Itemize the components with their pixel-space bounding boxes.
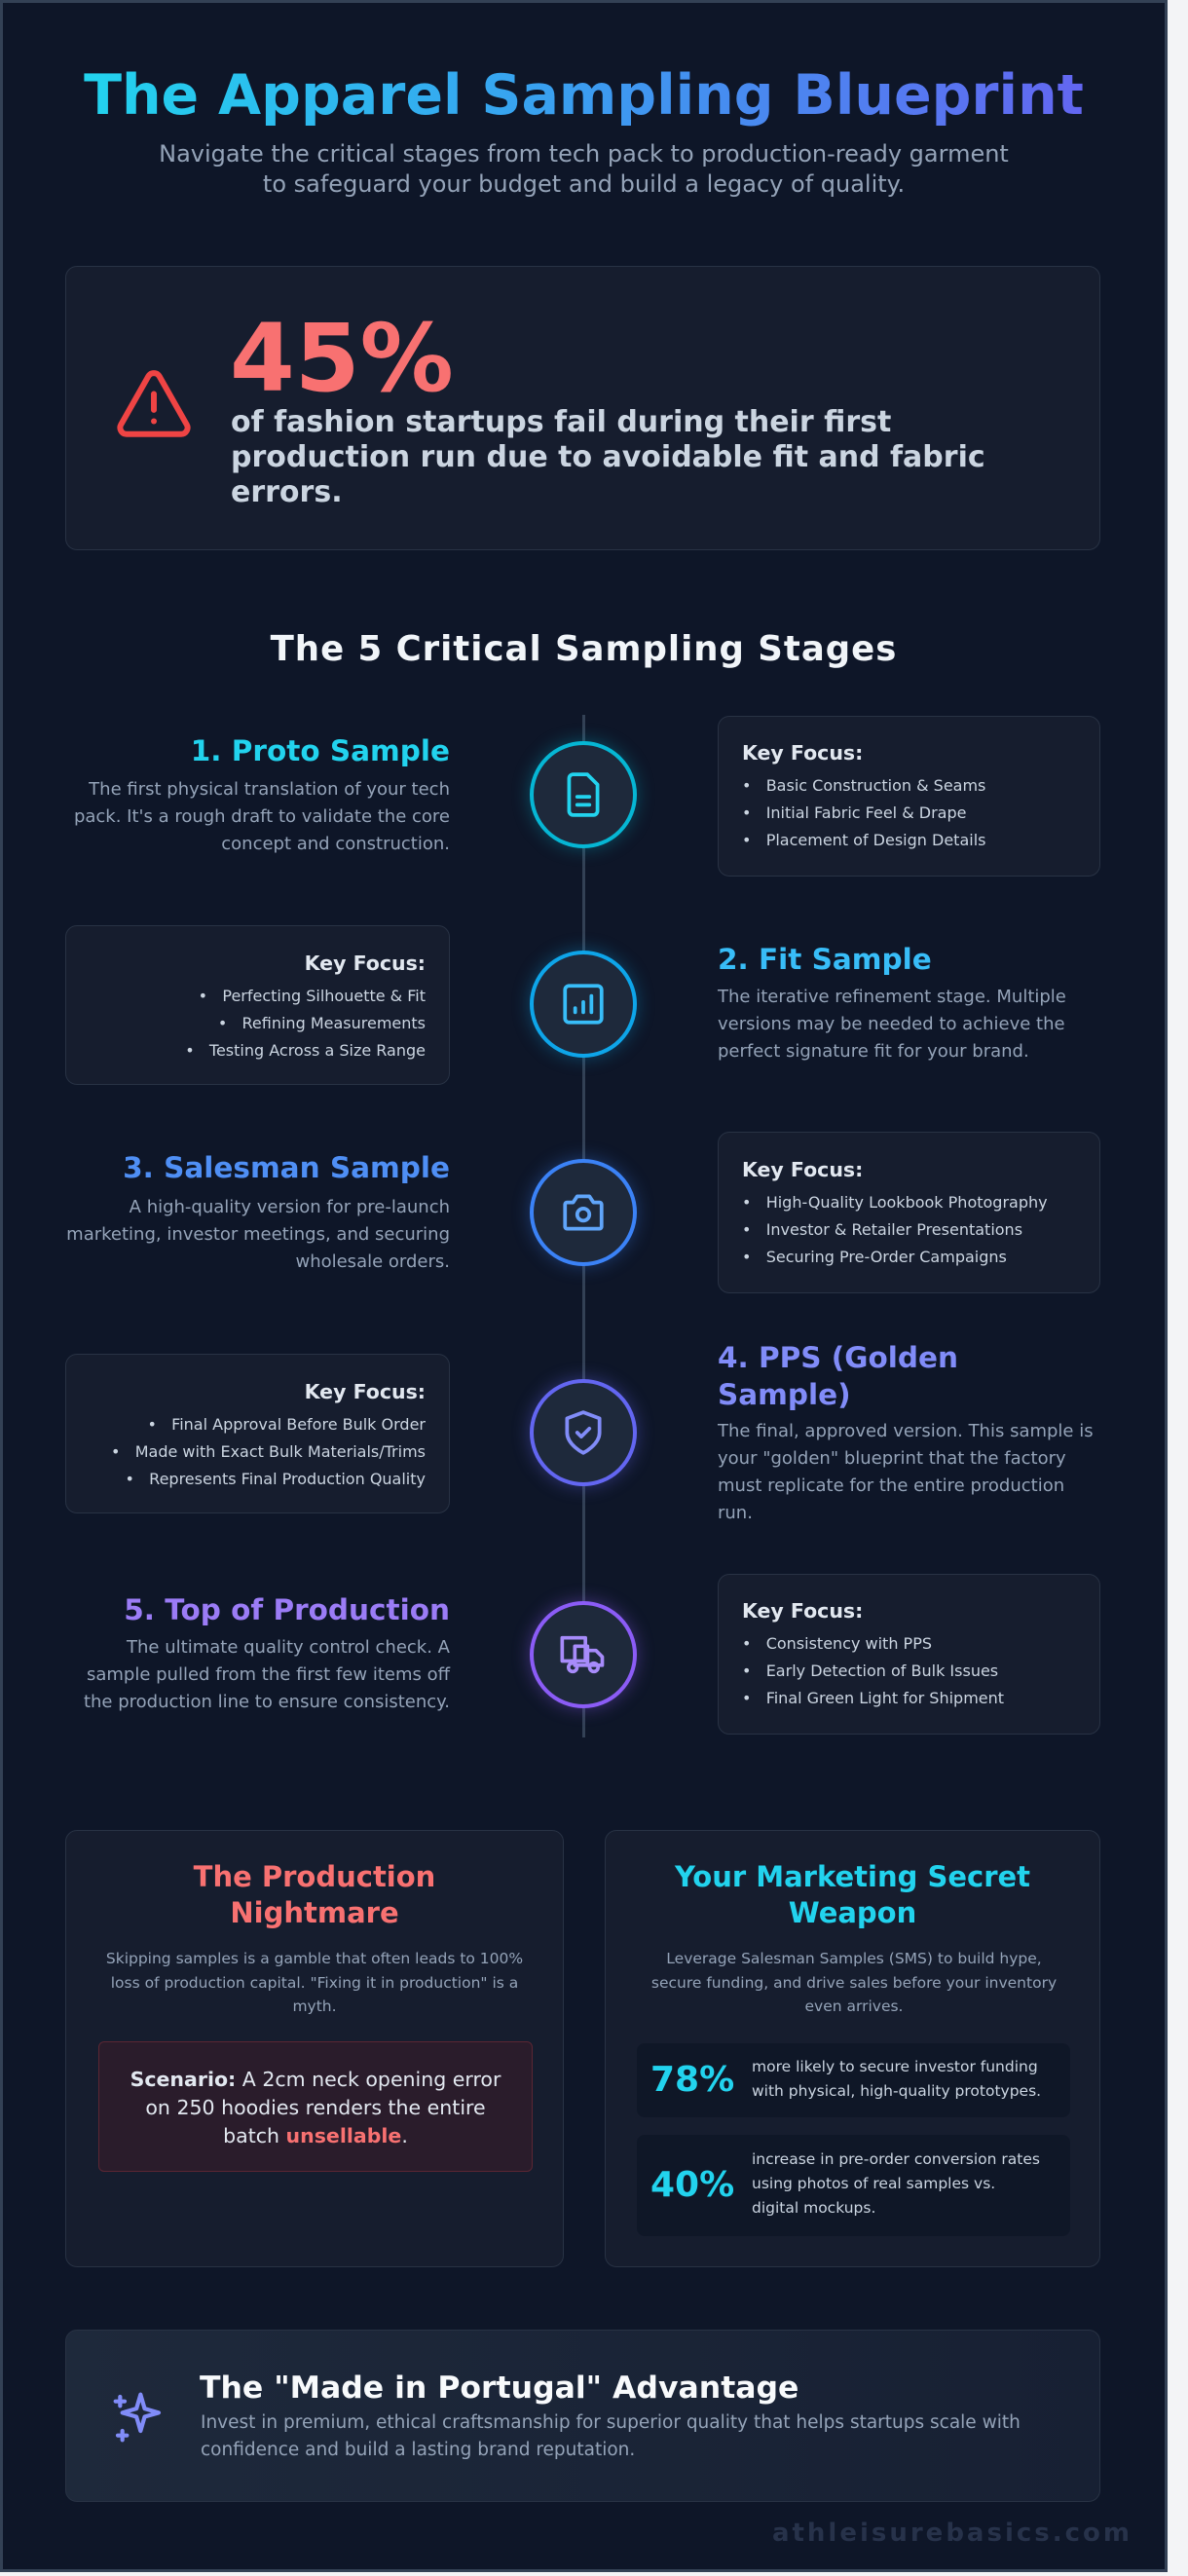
stat 40%: 40%: [650, 2165, 734, 2205]
marketing title: Weapon: [789, 1896, 916, 1929]
title: The Apparel Sampling Blueprint: [84, 63, 1084, 128]
stage 5 key focus card: Key Focus:: [742, 1599, 863, 1623]
stat 40%: increase in pre-order conversion rates: [752, 2150, 1040, 2168]
stat 40%: digital mockups.: [752, 2199, 875, 2217]
stage 2 key focus card: [65, 925, 450, 1085]
stage 3 desc: A high-quality version for pre-launch marketing, investor meetings, and securing wholesale orders.: [66, 1197, 450, 1272]
marketing title: [674, 1860, 1030, 1929]
stage 3 title: 3. Salesman Sample: [123, 1151, 450, 1184]
stage 3 key focus card: • Securing Pre-Order Campaigns: [742, 1248, 1007, 1266]
stage 3 icon: [530, 1159, 637, 1266]
stage 4 key focus card: • Represents Final Production Quality: [125, 1470, 426, 1488]
portugal desc: Invest in premium, ethical craftsmanship for superior quality that helps startups scale with confidence and build a lasting brand reputation.: [201, 2412, 1021, 2460]
stage 1 key focus card: [718, 716, 1100, 877]
stage 1 icon: [530, 741, 637, 848]
heading: stages: The 5 Critical Sampling Stages: [271, 629, 897, 669]
stage 2 icon: [530, 951, 637, 1058]
stage 1: [74, 716, 1100, 877]
timeline line: [582, 715, 585, 1737]
stage 5 desc: The ultimate quality control check. A sample pulled from the first few items off the production line to ensure consistency.: [84, 1637, 450, 1712]
stage 4: [65, 1341, 1094, 1523]
stage 4 icon: [530, 1379, 637, 1486]
subtitle: to safeguard your budget and build a legacy of quality.: [263, 170, 905, 198]
stage 4 key focus card: • Final Approval Before Bulk Order: [147, 1415, 426, 1434]
stat 40%: using photos of real samples vs.: [752, 2175, 995, 2192]
stat 40%: [637, 2135, 1070, 2236]
scenario callout: Scenario: A 2cm neck opening error on 250 hoodies renders the entire batch unsellable.: [130, 2068, 501, 2147]
stage 2 key focus card: • Perfecting Silhouette & Fit: [199, 987, 426, 1005]
stage 5 key focus card: [718, 1574, 1100, 1735]
nightmare title: Nightmare: [230, 1896, 399, 1929]
panel: production nightmare: [65, 1830, 564, 2267]
subtitle: Navigate the critical stages from tech pack to production-ready garment: [159, 140, 1009, 168]
portugal title: The "Made in Portugal" Advantage: [200, 2371, 798, 2406]
stage 3 key focus card: • Investor & Retailer Presentations: [742, 1220, 1022, 1239]
stage 3: [66, 1132, 1100, 1293]
stat number: 45%: [230, 304, 454, 413]
icon: sparkle: [113, 2392, 162, 2443]
stage 5 key focus card: • Final Green Light for Shipment: [742, 1689, 1004, 1707]
stat 78%: more likely to secure investor funding: [752, 2058, 1038, 2075]
panel: marketing secret weapon: [605, 1830, 1100, 2267]
stage 3 key focus card: [718, 1132, 1100, 1293]
stage 4 key focus card: [65, 1354, 450, 1513]
panel: stat 45%: [65, 266, 1100, 550]
stage 4 desc: The final, approved version. This sample is your "golden" blueprint that the factory must replicate for the entire production run.: [718, 1421, 1094, 1523]
marketing desc: Leverage Salesman Samples (SMS) to build hype, secure funding, and drive sales before your inventory even arrives.: [651, 1950, 1057, 2015]
stage 2 key focus card: • Testing Across a Size Range: [185, 1041, 426, 1060]
stage 4 title: 4. PPS (Golden Sample): [718, 1341, 958, 1411]
stage 4 key focus card: • Made with Exact Bulk Materials/Trims: [111, 1442, 426, 1461]
stage 4 key focus card: Key Focus:: [305, 1380, 426, 1403]
marketing title: Your Marketing Secret: [675, 1860, 1030, 1893]
icon: warning: [117, 370, 191, 437]
stage 1 key focus card: Key Focus:: [742, 741, 863, 765]
nightmare desc: Skipping samples is a gamble that often leads to 100% loss of production capital. "Fixing it in production" is a myth.: [106, 1950, 523, 2015]
subtitle: [159, 140, 1009, 198]
stage 5 title: 5. Top of Production: [124, 1593, 450, 1626]
stage 2 desc: The iterative refinement stage. Multiple versions may be needed to achieve the perfect signature fit for your brand.: [718, 987, 1066, 1062]
footer brand: athleisurebasics.com: [772, 2519, 1132, 2548]
stage 5: [84, 1574, 1100, 1735]
stage 3 key focus card: Key Focus:: [742, 1158, 863, 1181]
stage 5 icon: [530, 1601, 637, 1708]
stage 2 key focus card: • Refining Measurements: [218, 1014, 426, 1032]
nightmare title: [193, 1860, 435, 1929]
stat 78%: with physical, high-quality prototypes.: [752, 2082, 1041, 2100]
stage 1 key focus card: • Placement of Design Details: [742, 831, 985, 849]
stage 1 desc: The first physical translation of your tech pack. It's a rough draft to validate the core concept and construction.: [74, 779, 450, 854]
stage 2 key focus card: Key Focus:: [305, 952, 426, 975]
stat 78%: 78%: [650, 2060, 734, 2100]
stage 1 key focus card: • Initial Fabric Feel & Drape: [742, 803, 966, 822]
stage 2: [65, 925, 1066, 1085]
stage 5 key focus card: • Consistency with PPS: [742, 1634, 932, 1653]
stage 1 title: 1. Proto Sample: [191, 734, 450, 767]
stage 1 key focus card: • Basic Construction & Seams: [742, 776, 985, 795]
nightmare title: The Production: [194, 1860, 435, 1893]
panel: made in portugal: [65, 2330, 1100, 2502]
scenario callout: [98, 2041, 533, 2172]
stat 78%: [637, 2043, 1070, 2117]
stage 3 key focus card: • High-Quality Lookbook Photography: [742, 1193, 1048, 1212]
stage 5 key focus card: • Early Detection of Bulk Issues: [742, 1661, 998, 1680]
stage 2 title: 2. Fit Sample: [718, 943, 932, 976]
stat text: of fashion startups fail during their first production run due to avoidable fit and fabric errors.: [231, 405, 985, 509]
